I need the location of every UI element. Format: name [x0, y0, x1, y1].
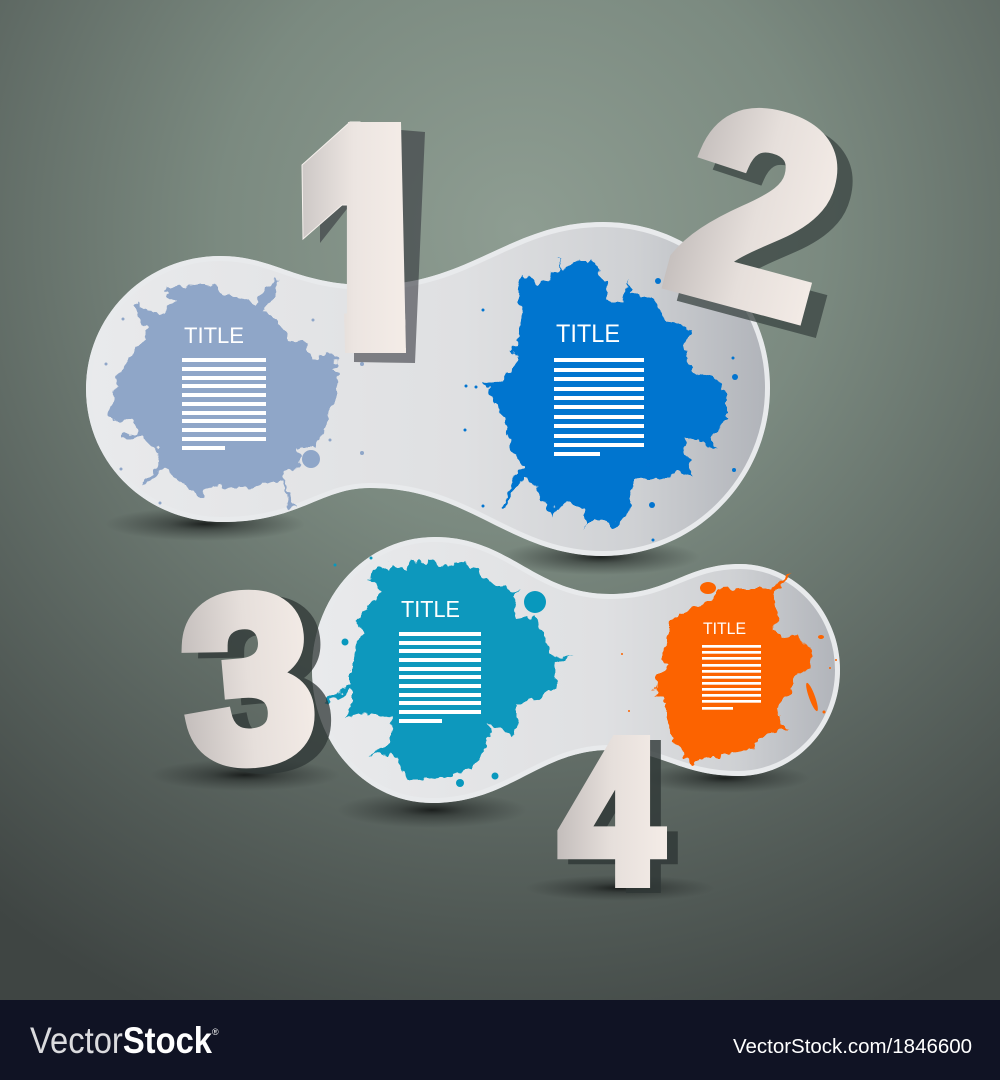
footer logo: VectorStock: [30, 1020, 212, 1061]
paper fold of numeral 1: [302, 122, 360, 239]
text lines: step 4: [702, 645, 761, 710]
splat: step 4 orange: [621, 572, 837, 767]
numeral 3: 3: [189, 550, 340, 819]
splat: step 3 teal: [323, 556, 572, 787]
numeral 2: 2: [661, 59, 884, 388]
splat: step 1 light blue: [104, 278, 364, 509]
panel: top connected bubbles: [86, 222, 770, 556]
splat: step 2 blue: [464, 257, 738, 542]
digit: 1: [274, 48, 462, 426]
title: step 2: TITLE: [556, 320, 620, 348]
text lines: step 3: [399, 632, 481, 723]
footer bar: [0, 1000, 1000, 1080]
numeral 1: [302, 122, 425, 363]
title: step 1: TITLE: [184, 323, 244, 348]
panel: bottom connected bubbles: [312, 537, 840, 803]
numeral 4: 4: [571, 702, 673, 931]
cast shadow of numeral 1: [320, 130, 425, 363]
text lines: step 1: [182, 358, 266, 450]
text lines: step 2: [554, 358, 644, 456]
title: step 3: TITLE: [401, 596, 460, 622]
numeral 4: 4: [560, 697, 663, 926]
numeral 2: 2: [646, 46, 869, 376]
contact shadows: [105, 507, 810, 901]
footer id: VectorStock.com/1846600: [733, 1036, 972, 1058]
registered mark: ®: [212, 1027, 219, 1037]
numeral 3: 3: [173, 545, 324, 814]
title: step 4: TITLE: [703, 620, 746, 638]
